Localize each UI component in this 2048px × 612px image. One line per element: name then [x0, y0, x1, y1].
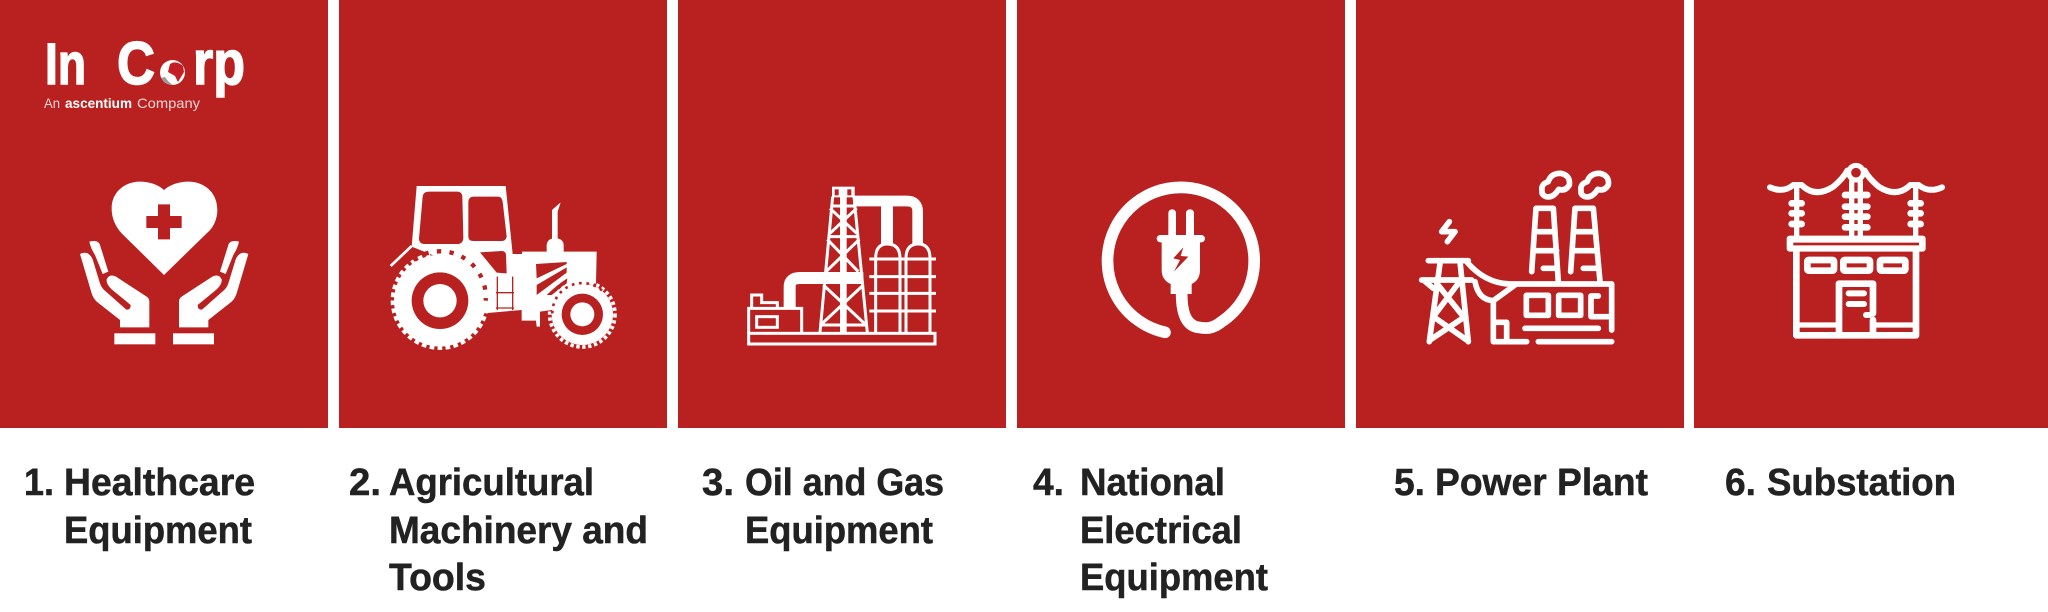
logo: InCorp: An: [44, 95, 60, 111]
label: 2. Agricultural Machinery and Tools: [349, 462, 648, 599]
label: 1. Healthcare Equipment: Healthcare: [64, 462, 255, 504]
label: 3. Oil and Gas Equipment: 3.: [702, 462, 734, 504]
logo: InCorp: ascentium: [65, 95, 132, 111]
icon: tractor: [391, 186, 615, 348]
label: 4. National Electrical Equipment: [1033, 462, 1268, 599]
label: 1. Healthcare Equipment: [24, 462, 255, 552]
icon: oil rig and tanks: [749, 187, 936, 344]
logo: InCorp: Company: [137, 95, 200, 111]
logo: InCorp: C: [117, 30, 155, 97]
label: 1. Healthcare Equipment: Equipment: [64, 510, 252, 552]
icon: heart in caring hands: [80, 182, 248, 344]
label: 6. Substation: Substation: [1767, 462, 1956, 504]
label: 5. Power Plant: Power Plant: [1435, 462, 1648, 504]
label: 1. Healthcare Equipment: 1.: [24, 462, 54, 504]
label: 4. National Electrical Equipment: 4.: [1033, 462, 1064, 504]
panel background: substation: [1694, 0, 2048, 428]
panel: agricultural machinery: [339, 0, 667, 428]
label: 2. Agricultural Machinery and Tools: Agricultural: [389, 462, 594, 504]
label: 5. Power Plant: 5.: [1394, 462, 1425, 504]
icon: plug and cord: [1108, 187, 1254, 332]
label: 4. National Electrical Equipment: National: [1080, 462, 1225, 504]
logo: InCorp: rp: [193, 29, 245, 98]
logo: InCorp: In: [45, 32, 86, 97]
label: 2. Agricultural Machinery and Tools: Tools: [389, 557, 486, 599]
label: 4. National Electrical Equipment: Equipment: [1080, 557, 1268, 599]
panel background: electrical: [1017, 0, 1345, 428]
panel: power plant: [1356, 0, 1684, 428]
panel: substation: [1694, 0, 2048, 428]
logo: InCorp: [44, 29, 245, 111]
label: 3. Oil and Gas Equipment: Oil and Gas: [745, 462, 944, 504]
icon: power plant with pylon: [1422, 173, 1612, 342]
icon: electrical substation: [1770, 165, 1942, 335]
label: 6. Substation: 6.: [1725, 462, 1756, 504]
label: 3. Oil and Gas Equipment: [702, 462, 944, 552]
panel: national electrical: [1017, 0, 1345, 428]
panel background: healthcare: [0, 0, 328, 428]
panel: healthcare equipment: [0, 0, 328, 428]
panel: oil and gas: [678, 0, 1006, 428]
label: 2. Agricultural Machinery and Tools: 2.: [349, 462, 381, 504]
panel background: oil and gas: [678, 0, 1006, 428]
label: 4. National Electrical Equipment: Electrical: [1080, 510, 1242, 552]
label: 3. Oil and Gas Equipment: Equipment: [745, 510, 933, 552]
panel background: power plant: [1356, 0, 1684, 428]
panel background: agricultural: [339, 0, 667, 428]
label: 2. Agricultural Machinery and Tools: Machinery and: [389, 510, 648, 552]
